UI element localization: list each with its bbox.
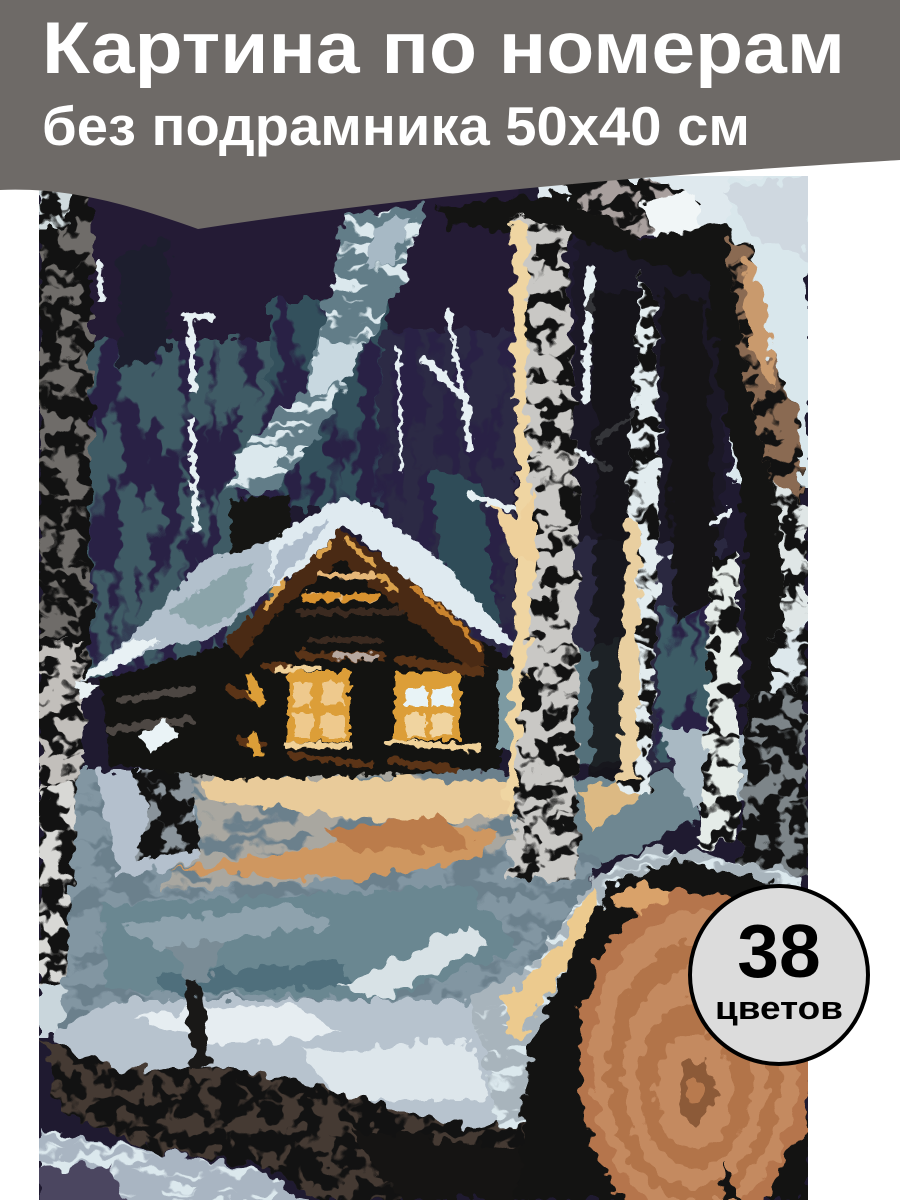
cabin gable logs [225,530,500,670]
roof eave [480,640,514,670]
roof left snow [80,540,272,682]
chimney [230,495,290,560]
cabin [75,495,525,780]
cabin right window panes [405,688,454,736]
centre birch trunk [490,215,578,880]
chimney smoke [225,205,425,490]
window sills [275,668,480,748]
roof right snow [270,498,520,650]
painting backdrop [39,176,808,1200]
thin white background branches [98,262,730,555]
foreground snow and dark roots [39,938,526,1200]
cabin left window [288,672,350,742]
dark forest background [85,190,725,770]
right side house teal [498,670,518,750]
snowy ground [60,730,745,1030]
top-right snow and sky [540,170,810,486]
cabin right window [395,672,460,740]
log cross-section rings [577,880,813,1200]
snow on wall [140,720,178,752]
painting: winter cabin in forest [39,170,813,1200]
badge: number of colours: 38 [737,909,821,993]
cabin wall [100,530,500,780]
black tree arch at top [434,188,808,782]
black bark [515,860,808,1200]
badge: number of colours: цветов [715,990,843,1026]
title: Картина по номерам [42,8,845,89]
right birch trunks [620,270,808,880]
rim gold edge [500,890,600,1040]
subtitle: без подрамника 50х40 см [42,95,750,157]
badge: number of colours [690,886,868,1064]
log highlights [110,540,480,770]
header banner [0,0,900,229]
rim snow [470,845,808,1130]
cut log rim with snow [470,845,808,1200]
cabin left window panes [293,682,344,738]
door glow marks [248,675,262,755]
dark fir tree on left [130,770,200,860]
left birch trunk [39,190,98,1038]
